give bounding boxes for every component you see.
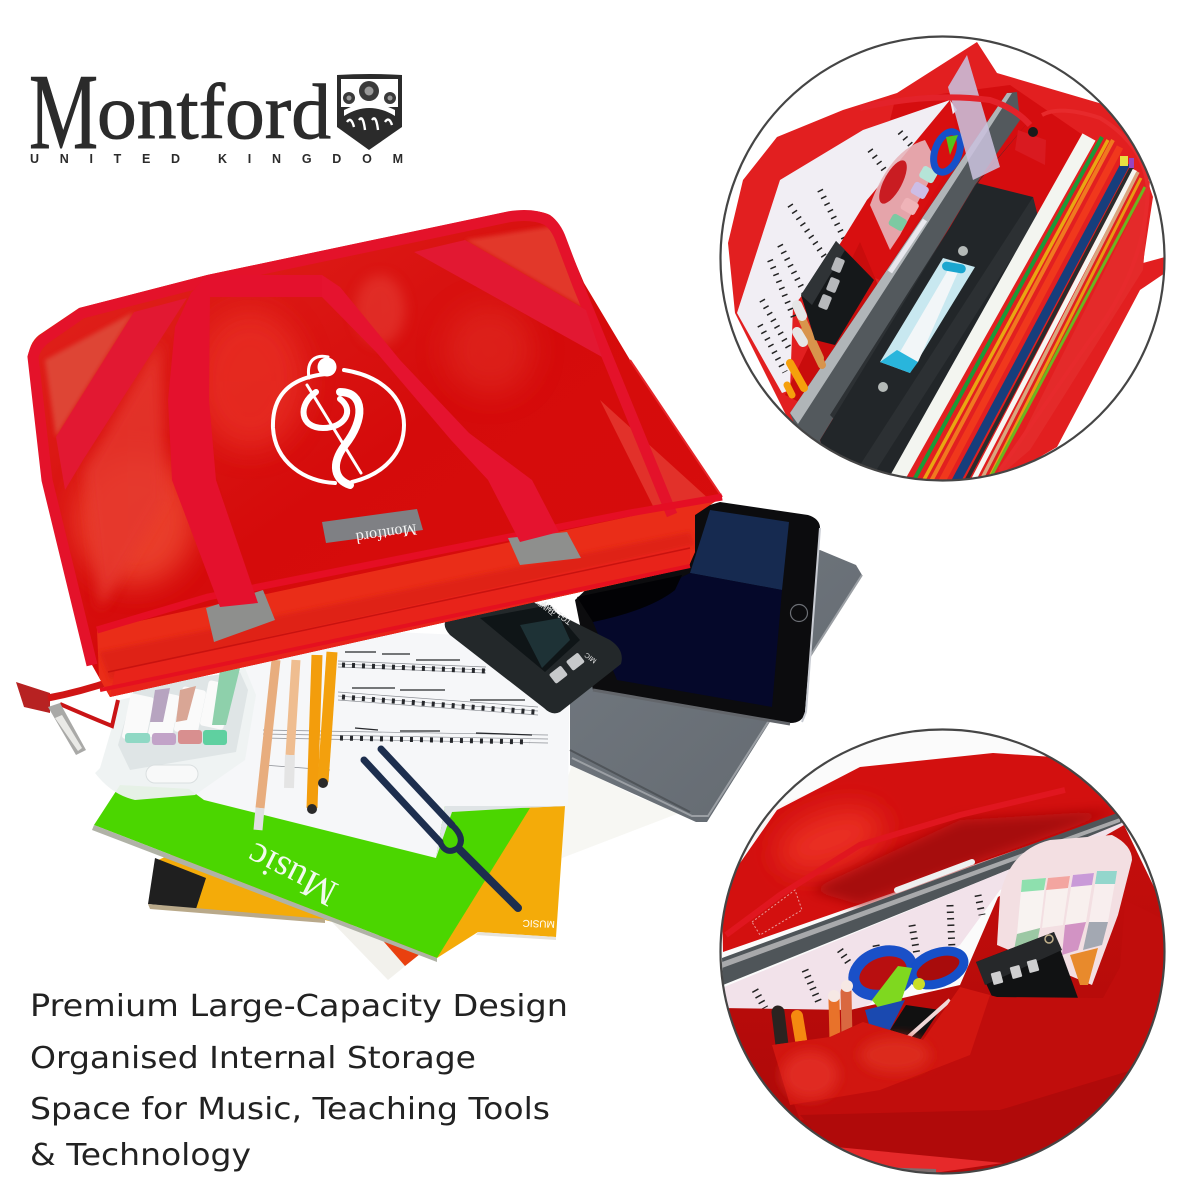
white sheet under laptop xyxy=(562,765,682,858)
bottom zip xyxy=(840,1148,1002,1172)
bag lining and edge xyxy=(728,42,1165,490)
binder spine label xyxy=(880,258,975,373)
yellow and purple index tabs xyxy=(1120,156,1134,168)
white and red book underneath xyxy=(330,920,425,980)
bag lower front panel xyxy=(97,497,722,700)
grey strap tab left xyxy=(206,590,275,642)
orange music book xyxy=(148,800,565,958)
ruler xyxy=(948,55,1000,180)
circle border xyxy=(720,36,1164,480)
handle strap right xyxy=(322,275,559,542)
logo wordmark: M xyxy=(29,53,98,172)
woven label: Montford xyxy=(355,520,418,546)
pencils xyxy=(258,652,332,830)
highlighter blister pack xyxy=(95,668,256,800)
bag top zip and pull xyxy=(860,97,1046,165)
tuner in pocket xyxy=(976,932,1098,1005)
interior back panel xyxy=(884,85,1082,274)
ring binder xyxy=(820,183,1038,490)
logo tagline: UNITED xyxy=(30,152,180,166)
grey strap tab right xyxy=(508,532,581,565)
sheet music in bag xyxy=(737,100,957,393)
pencils in pocket xyxy=(787,305,822,395)
music staves xyxy=(263,652,548,770)
stack of books xyxy=(885,137,1145,500)
orange music book: MUSIC xyxy=(523,917,555,929)
feature text list xyxy=(30,989,568,1173)
logo shield crest xyxy=(337,74,402,150)
scissors xyxy=(848,943,969,1040)
tuner in pocket xyxy=(801,241,874,345)
electronic tuner xyxy=(445,596,622,713)
lower dark fold xyxy=(800,1072,1128,1120)
feature: storage: Organised Internal Storage xyxy=(30,1041,476,1076)
treble clef emblem xyxy=(273,356,404,485)
tuning fork xyxy=(364,749,518,908)
feature: music and teaching: Space for Music, Teaching Tools xyxy=(30,1092,550,1127)
red bag front xyxy=(16,211,722,755)
logo wordmark xyxy=(29,53,331,172)
laptop edge xyxy=(790,92,1030,470)
front pockets xyxy=(772,987,1160,1120)
highlighters xyxy=(1014,871,1117,955)
bag right edge with zip xyxy=(998,109,1150,472)
detail circle: inner pocket view xyxy=(720,729,1170,1180)
bag flap lining xyxy=(722,753,1125,952)
diagonal webbing right xyxy=(414,240,602,357)
bag body xyxy=(28,211,722,697)
pale background xyxy=(720,729,1166,1175)
scissors xyxy=(929,128,965,176)
feature: capacity: Premium Large-Capacity Design xyxy=(30,989,568,1024)
tuner printed labels: TG1 98W xyxy=(540,599,573,627)
logo wordmark: ontford xyxy=(97,68,331,155)
green music book xyxy=(92,785,530,962)
laptop xyxy=(570,550,862,822)
detail circle: inside the bag from above xyxy=(720,36,1165,500)
sheet music in bag xyxy=(724,822,1125,1010)
front pocket xyxy=(840,100,953,280)
bag interior body xyxy=(720,825,1170,1180)
book title: Music xyxy=(240,834,344,914)
blister pack xyxy=(997,835,1132,985)
product flat lay xyxy=(92,502,862,980)
feature: technology: & Technology xyxy=(30,1138,251,1173)
sheet music xyxy=(170,630,570,858)
blister pack xyxy=(870,140,938,250)
logo tagline xyxy=(30,152,403,166)
electronic tuner: TUNER xyxy=(533,596,556,616)
laptop edge xyxy=(722,812,1122,985)
pens and pencils xyxy=(778,980,853,1046)
bag edge binding xyxy=(33,216,672,665)
highlighters xyxy=(121,668,240,745)
tablet xyxy=(575,502,820,724)
logo: Montford United Kingdom xyxy=(29,53,403,172)
woven label xyxy=(322,509,423,546)
diagonal webbing left xyxy=(56,298,187,490)
bag zip tab and puller xyxy=(16,680,118,755)
circle border xyxy=(720,730,1164,1174)
bag fabric sheen xyxy=(45,225,722,700)
bag piping and zip line xyxy=(97,497,722,690)
handle strap left xyxy=(168,275,327,607)
electronic tuner: MIC xyxy=(584,651,598,664)
logo tagline: KINGDOM xyxy=(218,152,403,166)
tuner buttons xyxy=(549,652,585,684)
